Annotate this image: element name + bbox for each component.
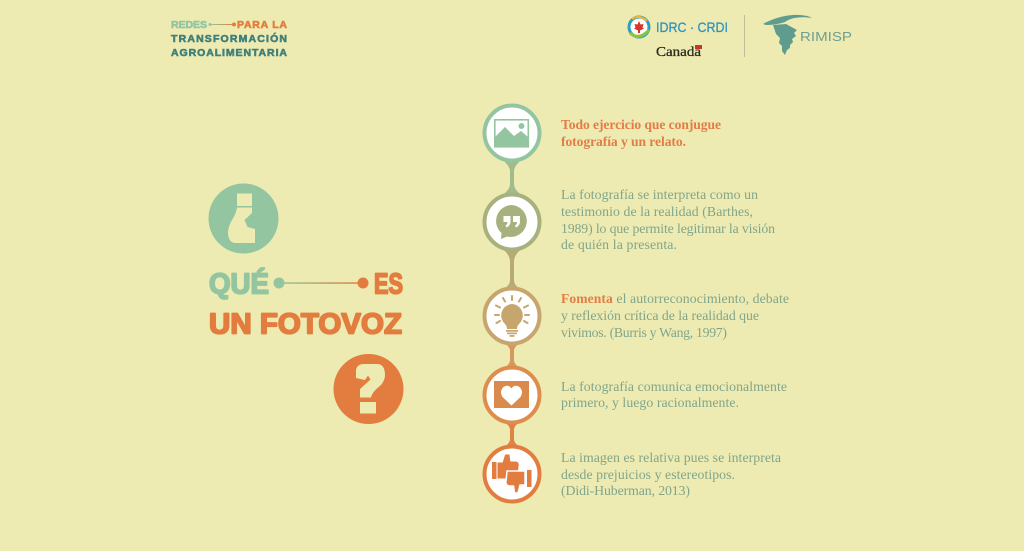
- step 5 text: La imagen es relativa pues se interpreta: [561, 450, 781, 465]
- step 5 text: (Didi-Huberman, 2013): [561, 483, 690, 499]
- step 3 text: [561, 291, 789, 341]
- step 3: light bulb icon: [484, 288, 540, 344]
- logo: Redes para la transformación agroalimentaria: TRANSFORMACIÓN: [171, 32, 287, 45]
- step 2 text: testimonio de la realidad (Barthes,: [561, 204, 753, 220]
- timeline connectors: [501, 159, 523, 449]
- step 4 text: La fotografía comunica emocionalmente: [561, 379, 787, 394]
- step 5 text: [561, 450, 781, 499]
- step 1 text: [561, 117, 721, 149]
- step 2 text: de quién la presenta.: [561, 237, 677, 252]
- step 3 text: Fomenta el autorreconocimiento, debate: [561, 291, 789, 306]
- step 4: photo with heart icon: [484, 368, 540, 422]
- logo: Redes para la transformación agroalimentaria: [171, 19, 287, 59]
- logo: Redes para la transformación agroalimentaria: AGROALIMENTARIA: [171, 47, 287, 59]
- step 5 text: desde prejuicios y estereotipos.: [561, 467, 735, 482]
- logo: Redes para la transformación agroalimentaria: REDES: [171, 19, 207, 31]
- title: ¿Qué es un fotovoz?: [209, 268, 403, 340]
- logo: IDRC CRDI Canada: IDRC · CRDI: [656, 19, 728, 35]
- step 1 text: Todo ejercicio que conjugue: [561, 117, 721, 132]
- title: ¿Qué es un fotovoz?: UN FOTOVOZ: [209, 308, 402, 340]
- step 2 text: La fotografía se interpreta como un: [561, 187, 758, 202]
- logo: RIMISP: [763, 15, 852, 55]
- step 1: image icon: [484, 106, 540, 160]
- step 4 text: [561, 379, 787, 410]
- logo: IDRC CRDI Canada: [629, 17, 728, 60]
- logo: IDRC CRDI Canada: Canada: [656, 45, 702, 60]
- title: ¿Qué es un fotovoz?: ES: [374, 268, 403, 300]
- title: ¿Qué es un fotovoz?: QUÉ: [209, 268, 269, 300]
- logo: Redes para la transformación agroalimentaria: PARA LA: [237, 19, 287, 31]
- step 1 text: fotografía y un relato.: [561, 134, 686, 149]
- step 5: thumbs up and down icon: [484, 446, 540, 502]
- step 4 text: primero, y luego racionalmente.: [561, 395, 739, 410]
- step 2 text: 1989) lo que permite legitimar la visión: [561, 221, 775, 237]
- step 2 text: [561, 187, 775, 252]
- icon: question mark: [334, 354, 404, 424]
- logo: RIMISP: RIMISP: [800, 29, 852, 44]
- step 2: speech bubble icon: [484, 194, 540, 250]
- step 3 text: vivimos. (Burris y Wang, 1997): [561, 325, 727, 341]
- icon: inverted question mark: [208, 184, 278, 254]
- step 3 text: y reflexión crítica de la realidad que: [561, 308, 759, 323]
